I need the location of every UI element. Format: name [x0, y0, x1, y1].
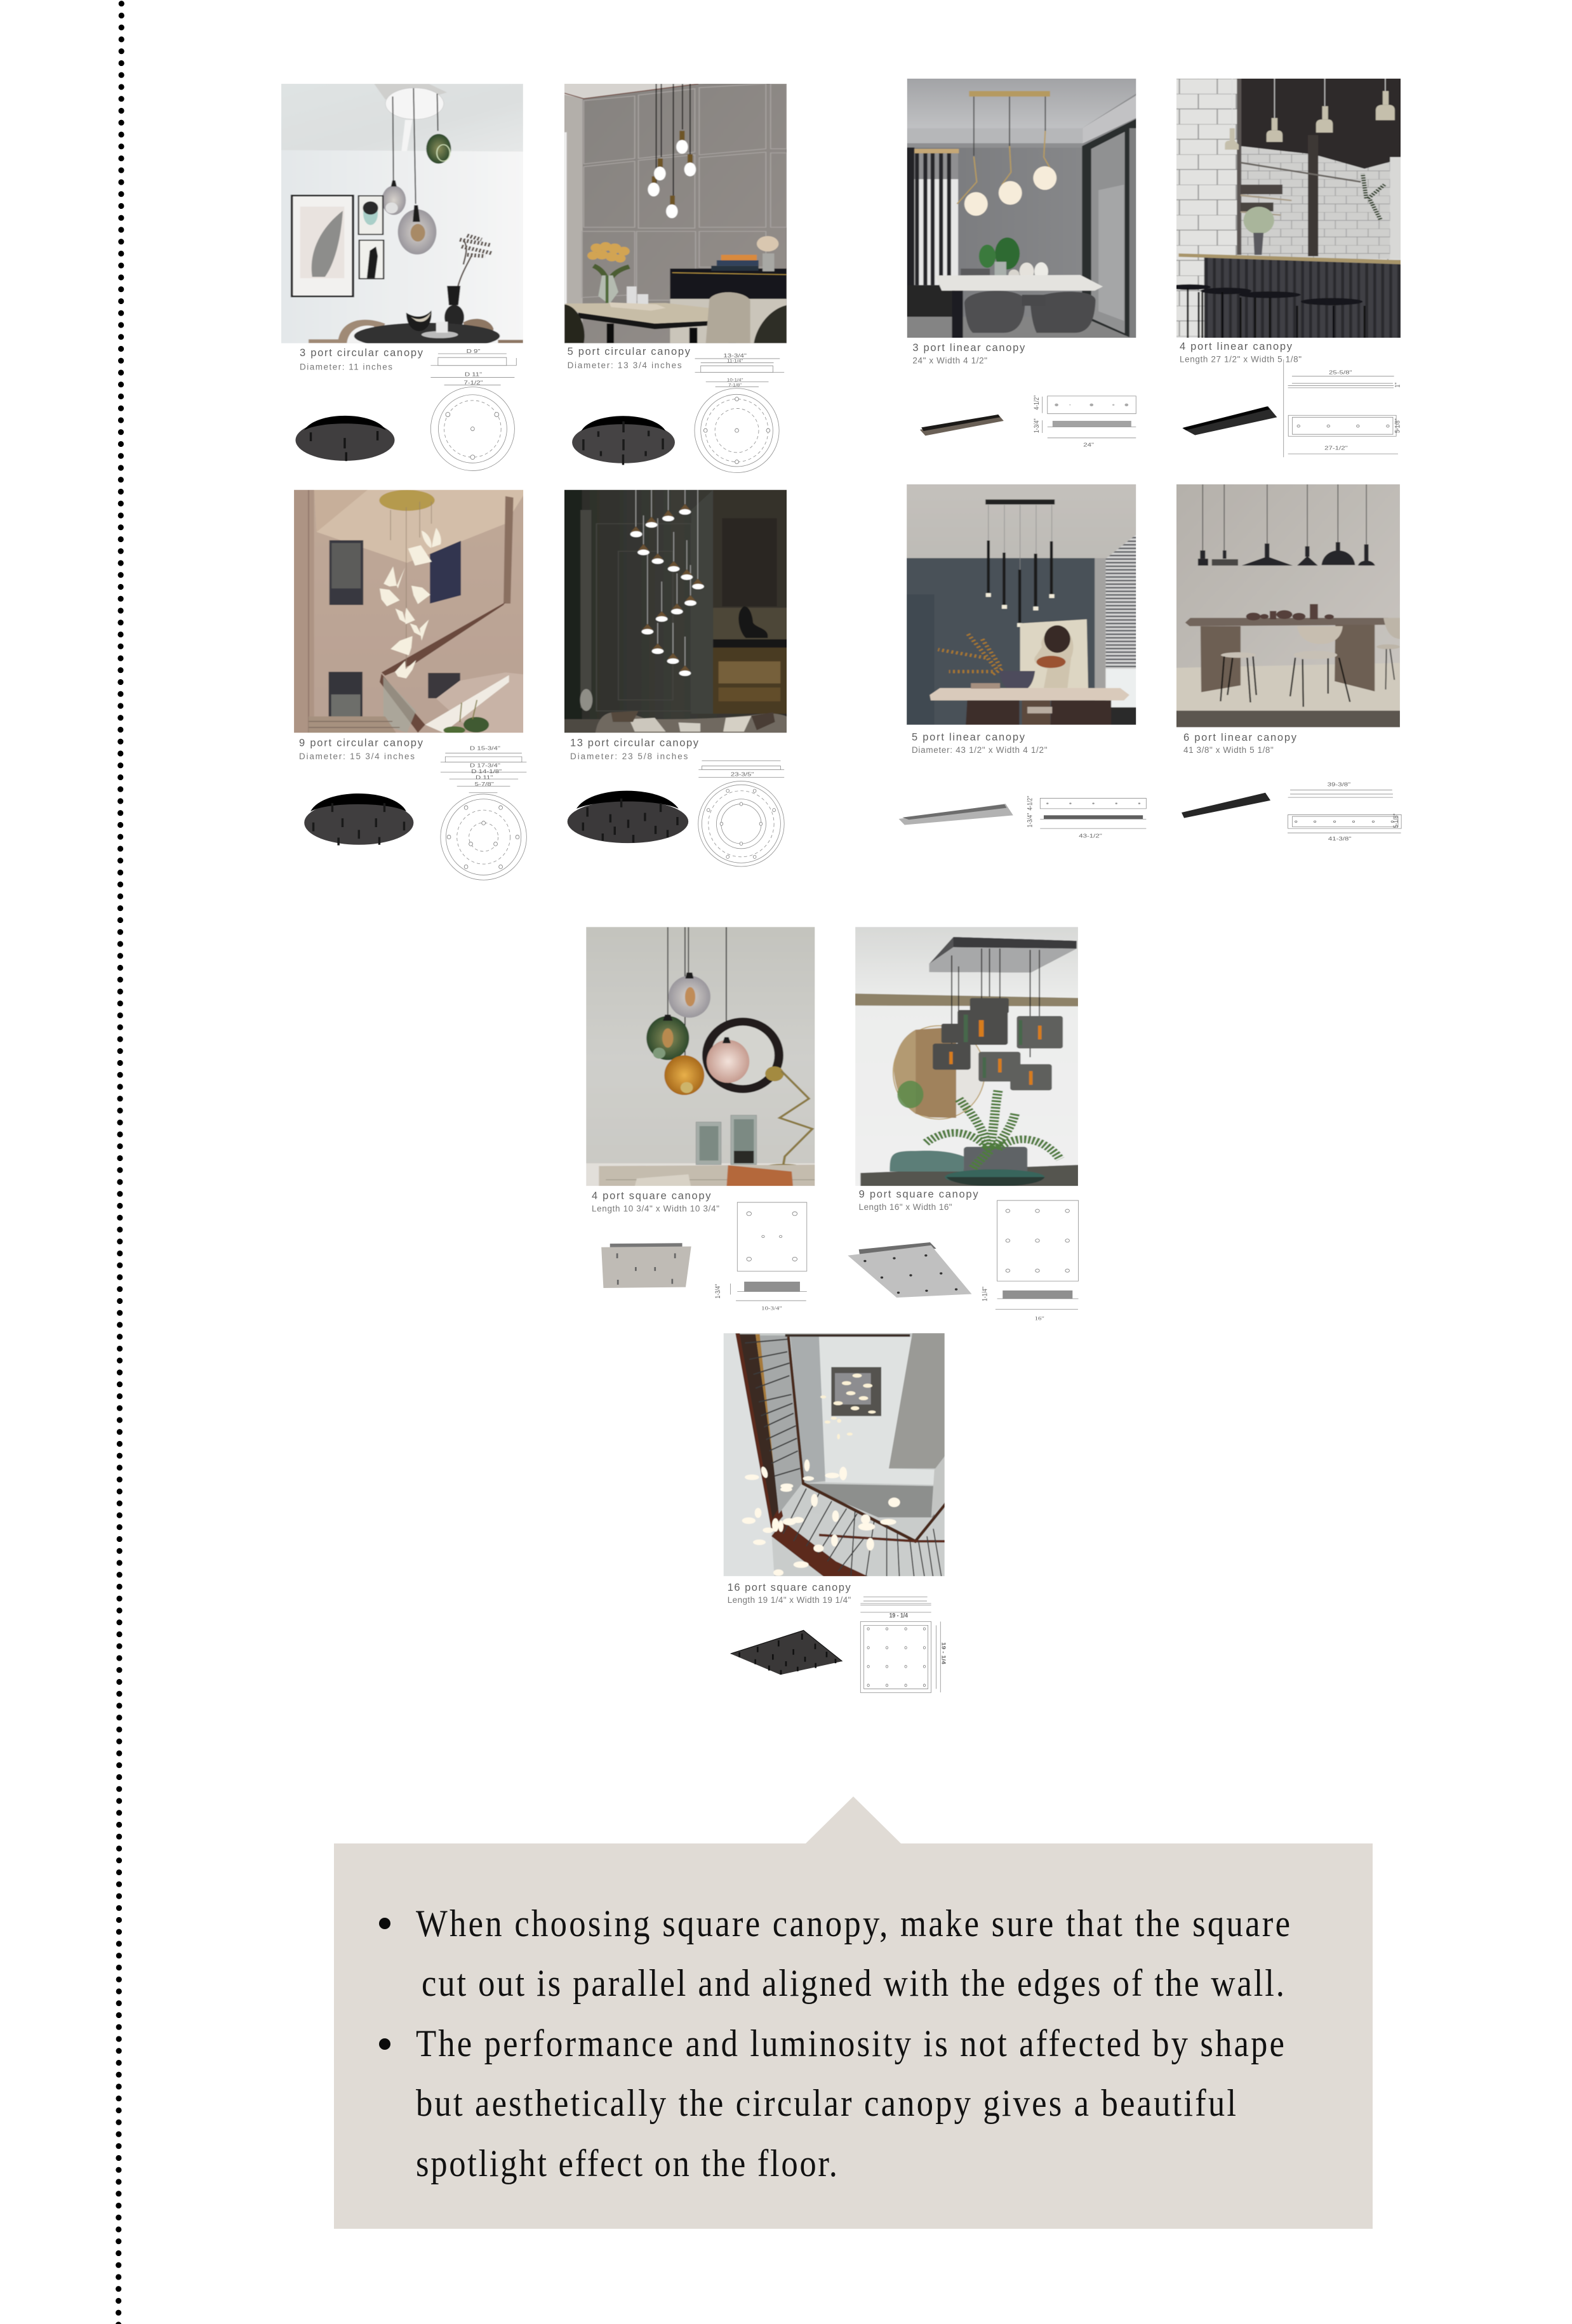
panel: 6 port linear canopy: [1169, 479, 1407, 842]
caption: [1183, 732, 1297, 755]
diagram: circular canopy dimensions: 13-3/4": [723, 353, 747, 359]
product: black circular canopy: [572, 416, 675, 465]
photo: dining room with five tube pendants: [907, 484, 1136, 725]
product: black circular canopy: [295, 416, 395, 461]
diagram: circular canopy dimensions: D 14-1/8": [471, 769, 502, 775]
diagram: circular canopy dimensions: 11-1/4": [727, 359, 743, 363]
diagram: circular canopy dimensions: D 11": [476, 775, 493, 781]
diagram: square canopy dimensions: [860, 1597, 947, 1692]
caption: [728, 1582, 851, 1605]
caption: [859, 1189, 978, 1212]
callout background: [334, 1843, 1373, 2229]
bullet list text: spotlight effect on the floor.: [416, 2143, 837, 2185]
caption: [912, 731, 1048, 755]
caption: 9 port square canopy: [859, 1189, 978, 1200]
diagram: circular canopy dimensions: [441, 746, 526, 880]
product: black circular canopy: [304, 793, 413, 846]
diagram: linear canopy dimensions: 27-1/2": [1324, 446, 1348, 451]
caption: Length 16" x Width 16": [859, 1202, 952, 1212]
caption: 16 port square canopy: [728, 1582, 851, 1593]
photo: coloured glass globes and round mirror: [586, 927, 815, 1186]
diagram: circular canopy dimensions: [695, 353, 784, 472]
diagram: linear canopy dimensions: 5-1/8": [1392, 813, 1400, 828]
caption: 5 port circular canopy: [568, 346, 691, 357]
panel: 9 port square canopy: [848, 922, 1085, 1322]
product: black circular canopy: [568, 791, 688, 843]
diagram: linear canopy dimensions: [1027, 795, 1146, 839]
caption: Diameter: 23 5/8 inches: [570, 752, 688, 761]
diagram: square canopy dimensions: [981, 1200, 1079, 1322]
panel: 16 port square canopy: [719, 1328, 949, 1692]
caption: [912, 342, 1025, 366]
caption: [1180, 341, 1302, 364]
diagram: linear canopy dimensions: [1033, 395, 1136, 448]
caption: 4 port linear canopy: [1180, 341, 1293, 352]
caption: 41 3/8" x Width 5 1/8": [1183, 745, 1274, 755]
panel: 4 port linear canopy: [1168, 73, 1408, 457]
diagram: circular canopy dimensions: 7-1/2": [463, 380, 483, 386]
diagram: square canopy dimensions: 1-1/4": [981, 1287, 989, 1301]
product: black linear canopy: [1182, 406, 1277, 435]
caption: 3 port linear canopy: [912, 342, 1025, 354]
diagram: circular canopy dimensions: D 17-3/4": [470, 763, 500, 769]
diagram: square canopy dimensions: [714, 1202, 807, 1311]
caption: Diameter: 15 3/4 inches: [299, 752, 415, 761]
photo: dining room with three glass pendants: [281, 84, 523, 343]
photo: stairwell with butterfly pendants: [294, 490, 523, 733]
caption: [592, 1190, 719, 1213]
diagram: circular canopy dimensions: 10-1/4": [727, 378, 743, 382]
caption: Length 19 1/4" x Width 19 1/4": [728, 1595, 851, 1605]
product: bronze linear canopy: [920, 415, 1004, 435]
diagram: circular canopy dimensions: 23-3/5": [731, 772, 754, 778]
diagram: linear canopy dimensions: 25-5/8": [1329, 370, 1352, 376]
caption: 6 port linear canopy: [1183, 732, 1297, 743]
caption: [299, 738, 423, 761]
caption: 24" x Width 4 1/2": [912, 356, 987, 366]
panel: 13 port circular canopy: [557, 484, 794, 867]
panel: 3 port linear canopy: [900, 73, 1143, 448]
caption: [568, 346, 691, 370]
diagram: linear canopy dimensions: 1-3/4": [1027, 813, 1034, 828]
product: silver linear canopy: [899, 804, 1013, 825]
caption: 5 port linear canopy: [912, 731, 1025, 743]
caption: Diameter: 43 1/2" x Width 4 1/2": [912, 745, 1048, 755]
caption: 4 port square canopy: [592, 1190, 711, 1202]
callout pointer triangle: [806, 1796, 901, 1843]
diagram: circular canopy dimensions: 7-1/8": [728, 383, 742, 387]
product: black square canopy: [731, 1630, 843, 1675]
photo: looking up stairwell with leaf pendants: [724, 1333, 945, 1576]
panel: 9 port circular canopy: [287, 484, 531, 880]
caption: Length 27 1/2" x Width 5 1/8": [1180, 355, 1302, 364]
diagram: linear canopy dimensions: 43-1/2": [1079, 833, 1102, 839]
panel: 5 port linear canopy: [899, 479, 1146, 839]
product: silver square canopy: [601, 1243, 691, 1288]
caption: Length 10 3/4" x Width 10 3/4": [592, 1204, 719, 1213]
diagram: circular canopy dimensions: [698, 760, 784, 867]
panel: 4 port square canopy: [579, 922, 822, 1311]
bullet list text: The performance and luminosity is not affected by shape: [416, 2023, 1284, 2065]
bullet list text: but aesthetically the circular canopy gives a beautiful: [416, 2083, 1236, 2125]
photo: grey panelled wall with bulb pendants: [564, 84, 787, 343]
diagram: linear canopy dimensions: [1284, 359, 1402, 457]
photo: smoked glass lanterns over plant and mirror: [855, 927, 1078, 1186]
photo: dark living room with cascading pendants: [564, 490, 787, 733]
diagram: linear canopy dimensions: 1": [1394, 382, 1402, 388]
panel: 3 port circular canopy: [274, 78, 530, 470]
diagram: linear canopy dimensions: 5-1/8": [1394, 418, 1402, 433]
diagram: circular canopy dimensions: [430, 349, 516, 470]
caption: [300, 347, 423, 372]
diagram: linear canopy dimensions: 41-3/8": [1328, 836, 1352, 842]
diagram: linear canopy dimensions: 24": [1083, 442, 1094, 448]
diagram: square canopy dimensions: 16": [1035, 1316, 1044, 1322]
panel: 5 port circular canopy: [557, 78, 794, 472]
photo: dining table with mixed black pendants: [1176, 484, 1400, 727]
diagram: circular canopy dimensions: D 9": [467, 349, 481, 354]
caption: 13 port circular canopy: [570, 738, 699, 749]
diagram: square canopy dimensions: 10-3/4": [761, 1306, 782, 1311]
caption: 9 port circular canopy: [299, 738, 423, 749]
bullet list text: cut out is parallel and aligned with the edges of the wall.: [422, 1963, 1284, 2005]
diagram: linear canopy dimensions: 4-1/2": [1027, 795, 1034, 811]
diagram: square canopy dimensions: 19 - 1/4: [940, 1642, 947, 1664]
bullet list text: [379, 1903, 1290, 2185]
diagram: square canopy dimensions: 1-3/4": [714, 1284, 723, 1299]
photo: kitchen bar with metallic pendants: [1176, 79, 1401, 338]
dotted vertical line: [119, 4, 121, 2324]
diagram: linear canopy dimensions: 1-3/4": [1033, 418, 1041, 433]
diagram: circular canopy dimensions: 5-7/8": [475, 781, 494, 787]
diagram: linear canopy dimensions: 4-1/2": [1033, 395, 1041, 410]
diagram: circular canopy dimensions: D 11": [465, 372, 483, 378]
bullet list text: When choosing square canopy, make sure that the square: [416, 1903, 1290, 1945]
callout: note panel with pointer: [334, 1796, 1373, 2229]
caption: 3 port circular canopy: [300, 347, 423, 359]
caption: [570, 738, 699, 761]
diagram: linear canopy dimensions: [1288, 782, 1401, 842]
product: black linear canopy: [1182, 793, 1270, 818]
product: silver square canopy: [848, 1242, 971, 1298]
diagram: circular canopy dimensions: D 15-3/4": [470, 746, 500, 752]
photo: dining room with three globe pendants: [907, 79, 1136, 338]
diagram: linear canopy dimensions: 39-3/8": [1328, 782, 1351, 788]
diagram: square canopy dimensions: 19 - 1/4: [889, 1612, 909, 1619]
caption: Diameter: 13 3/4 inches: [568, 361, 682, 370]
caption: Diameter: 11 inches: [300, 362, 392, 372]
